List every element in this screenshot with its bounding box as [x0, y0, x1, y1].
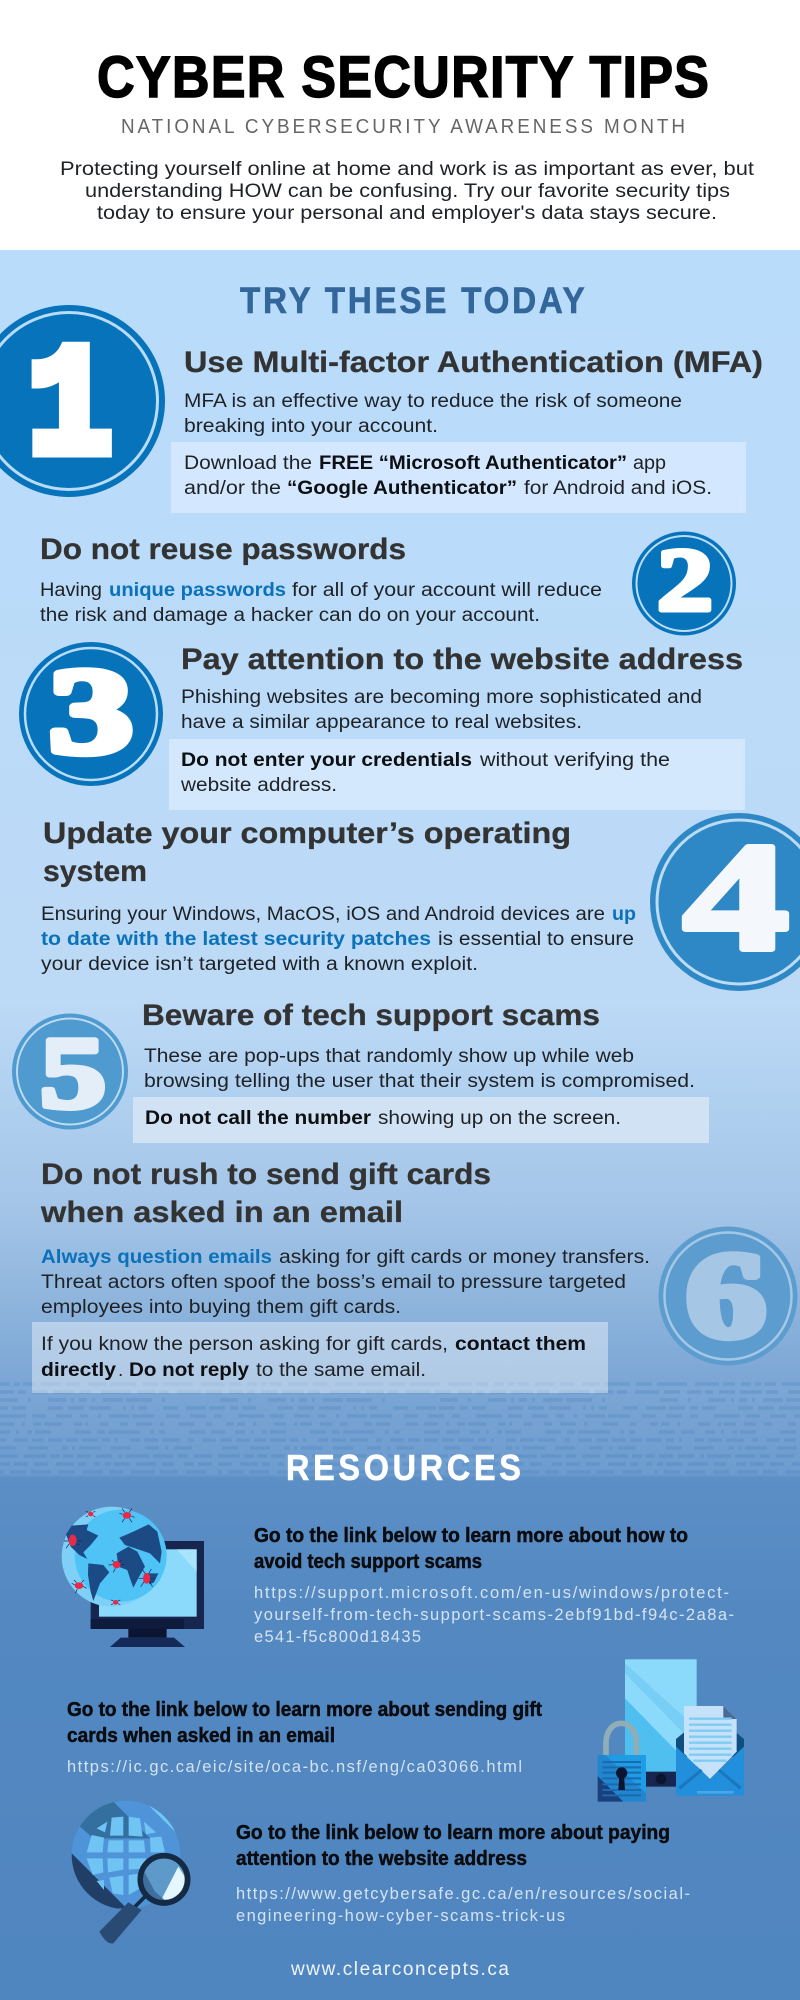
heading 6: when asked in an email: [40, 1196, 403, 1229]
footer website: www.clearconcepts.ca: [290, 1959, 509, 1980]
heading: gift cards link: cards when asked in an email: [67, 1725, 335, 1747]
header background: [0, 0, 800, 250]
subtitle: NATIONAL CYBERSECURITY AWARENESS MONTH: [121, 115, 685, 138]
link: ic.gc.ca: https://ic.gc.ca/eic/site/oca-bc.nsf/eng/ca03066.html: [67, 1758, 522, 1776]
callout 1: FREE “Microsoft Authenticator”: [319, 453, 627, 474]
text 2: Having: [40, 580, 102, 601]
heading: tech support scams link: [254, 1525, 688, 1573]
callout 6: .: [118, 1360, 123, 1381]
panel: tip 5: [12, 999, 709, 1143]
badge 6: 6: [686, 1228, 766, 1363]
text 2: [40, 580, 602, 626]
callout 3: [169, 739, 745, 810]
text 6: [41, 1247, 650, 1318]
intro text: understanding HOW can be confusing. Try our favorite security tips: [85, 181, 730, 202]
section heading: resources: RESOURCES: [286, 1448, 521, 1488]
heading 4: [43, 817, 571, 888]
link: microsoft: yourself-from-tech-support-scams-2ebf91bd-f94c-2a8a-: [254, 1606, 734, 1624]
badge 3: 3: [49, 644, 133, 779]
badge 6: [658, 1226, 798, 1366]
heading: website address link: attention to the website address: [236, 1848, 527, 1870]
text 4: [41, 904, 636, 975]
title: CYBER SECURITY TIPS: [97, 44, 709, 110]
text 6: asking for gift cards or money transfers.: [279, 1247, 650, 1268]
text 6: Always question emails: [41, 1247, 272, 1268]
callout 1: [171, 442, 746, 513]
text 5: [144, 1046, 695, 1092]
badge 2: 2: [657, 531, 713, 630]
text 4: Ensuring your Windows, MacOS, iOS and Android devices are: [41, 904, 605, 925]
badge 4: [650, 811, 800, 991]
text 4: to date with the latest security patches: [41, 929, 431, 950]
section heading: try these today: TRY THESE TODAY: [240, 280, 585, 321]
badge 1: 1: [28, 321, 112, 498]
callout 3: website address.: [180, 775, 337, 796]
text 6: Threat actors often spoof the boss’s email to pressure targeted: [41, 1272, 626, 1293]
panel: tip 1: [0, 305, 763, 513]
heading: website address link: Go to the link below to learn more about paying: [236, 1822, 670, 1844]
heading 4: Update your computer’s operating: [43, 817, 571, 850]
text 4: your device isn’t targeted with a known exploit.: [41, 954, 478, 975]
panel: resource 2: [67, 1659, 744, 1802]
panel: resource 3: [70, 1801, 690, 1944]
text 4: is essential to ensure: [438, 929, 634, 950]
panel: tip 2: [40, 531, 736, 636]
badge 1: [0, 305, 165, 498]
callout 1: app: [633, 453, 666, 474]
intro text: [60, 159, 755, 224]
heading: website address link: [236, 1822, 670, 1870]
icon: monitor with infected globe: [62, 1507, 204, 1647]
heading: gift cards link: Go to the link below to learn more about sending gift: [67, 1699, 542, 1721]
callout 5: [133, 1097, 709, 1143]
intro text: today to ensure your personal and employer's data stays secure.: [97, 203, 717, 224]
text 2: unique passwords: [109, 580, 286, 601]
callout 1: Download the: [184, 453, 312, 474]
link: microsoft: https://support.microsoft.com/en-us/windows/protect-: [254, 1584, 729, 1602]
callout 1: “Google Authenticator”: [287, 478, 517, 499]
text 1: breaking into your account.: [184, 416, 438, 437]
text 3: [181, 687, 702, 733]
badge 5: 5: [40, 1017, 106, 1130]
callout 6: contact them: [455, 1334, 586, 1355]
callout 5: Do not call the number: [145, 1108, 372, 1129]
callout 3: without verifying the: [479, 750, 670, 771]
heading: tech support scams link: avoid tech support scams: [254, 1551, 482, 1573]
callout 6: If you know the person asking for gift cards,: [41, 1334, 448, 1355]
intro text: Protecting yourself online at home and work is as important as ever, but: [60, 159, 755, 180]
icon: phone lock and envelope: [598, 1659, 744, 1802]
text 1: [184, 391, 682, 437]
heading 1: Use Multi-factor Authentication (MFA): [184, 346, 763, 379]
heading 4: system: [43, 855, 147, 888]
heading 6: Do not rush to send gift cards: [41, 1158, 491, 1191]
panel: tip 6: [32, 1158, 798, 1393]
icon: globe with magnifier: [70, 1801, 188, 1944]
callout 3: Do not enter your credentials: [181, 750, 472, 771]
badge 5: [12, 1014, 128, 1130]
link: microsoft: [254, 1584, 734, 1646]
heading: gift cards link: [67, 1699, 542, 1747]
callout 1: and/or the: [184, 478, 281, 499]
badge 4: 4: [683, 811, 789, 983]
callout 5: showing up on the screen.: [378, 1108, 621, 1129]
callout 6: Do not reply: [129, 1360, 249, 1381]
link: getcybersafe: engineering-how-cyber-scams-trick-us: [236, 1907, 565, 1925]
link: microsoft: e541-f5c800d18435: [254, 1628, 421, 1646]
heading 2: Do not reuse passwords: [40, 533, 406, 566]
callout 6: [32, 1322, 608, 1393]
text 5: These are pop-ups that randomly show up while web: [144, 1046, 634, 1067]
text 5: browsing telling the user that their system is compromised.: [144, 1071, 695, 1092]
callout 6: to the same email.: [256, 1360, 426, 1381]
heading 5: Beware of tech support scams: [142, 999, 600, 1032]
text 3: have a similar appearance to real websites.: [181, 712, 582, 733]
callout 1: for Android and iOS.: [524, 478, 712, 499]
panel: resource 1: [62, 1507, 734, 1647]
badge 2: [632, 531, 736, 636]
heading 3: Pay attention to the website address: [181, 643, 743, 676]
callout 6: directly: [41, 1360, 116, 1381]
link: getcybersafe: https://www.getcybersafe.gc.ca/en/resources/social-: [236, 1885, 690, 1903]
panel: tip 4: [41, 811, 800, 991]
heading: tech support scams link: Go to the link below to learn more about how to: [254, 1525, 688, 1547]
link: getcybersafe: [236, 1885, 690, 1925]
panel: tip 3: [19, 642, 745, 810]
badge 3: [19, 642, 163, 786]
text 4: up: [612, 904, 636, 925]
heading 6: [40, 1158, 491, 1229]
text 1: MFA is an effective way to reduce the risk of someone: [184, 391, 682, 412]
text 2: for all of your account will reduce: [292, 580, 602, 601]
text 2: the risk and damage a hacker can do on your account.: [40, 605, 540, 626]
text 3: Phishing websites are becoming more sophisticated and: [181, 687, 702, 708]
text 6: employees into buying them gift cards.: [41, 1297, 401, 1318]
